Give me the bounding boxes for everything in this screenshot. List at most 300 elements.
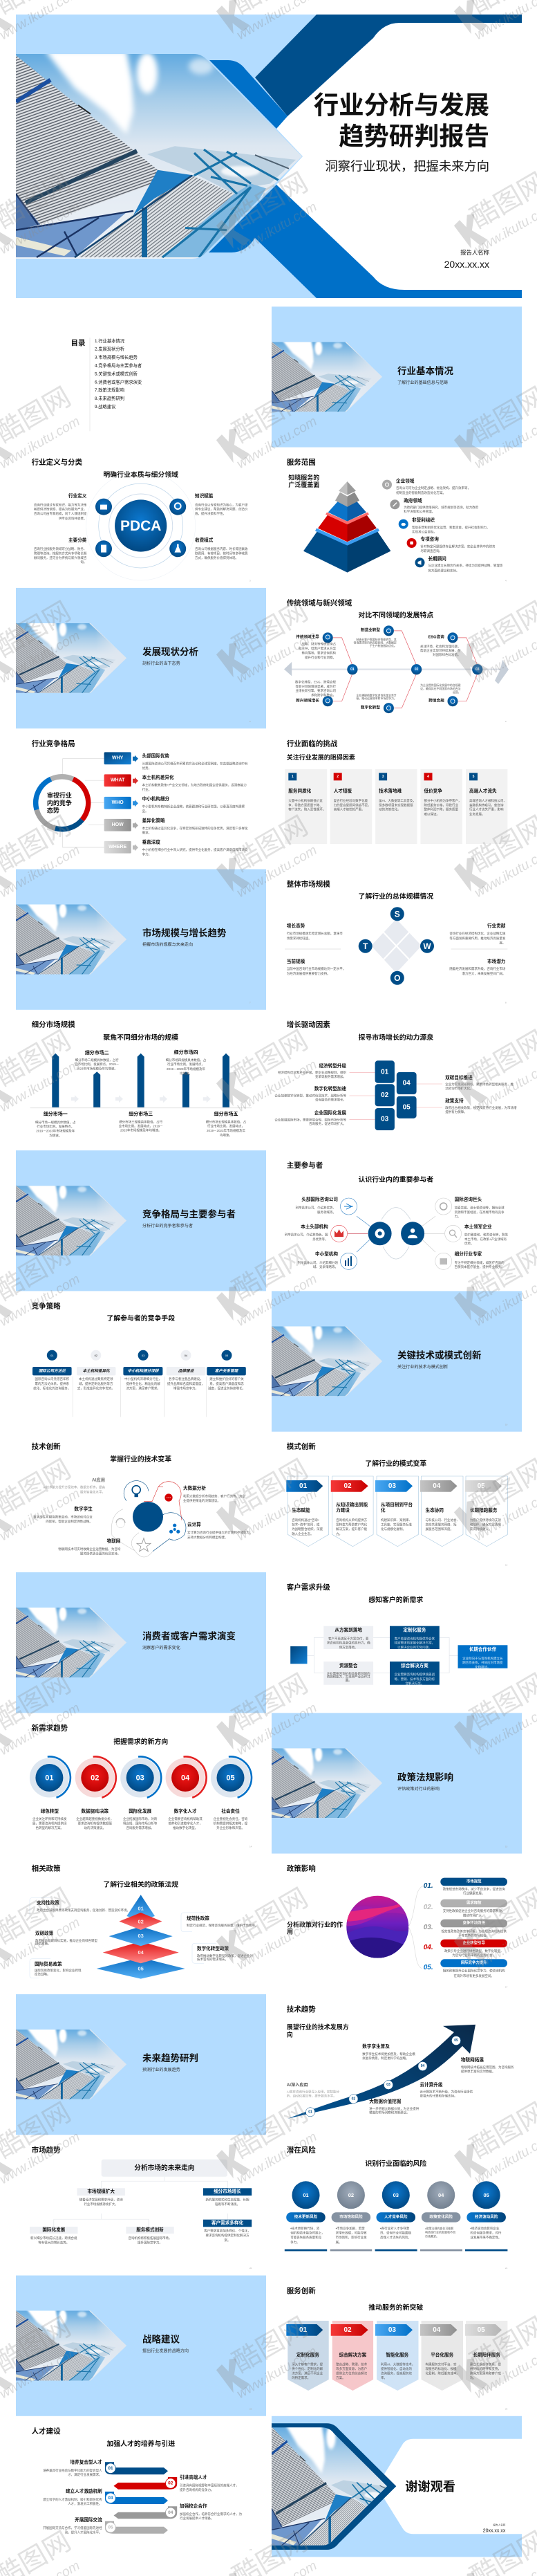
card 03: 咨询服务，提高服务效 — [381, 2371, 412, 2375]
slide title: 细分市场规模 — [32, 1020, 75, 1029]
petal: star — [131, 1533, 153, 1557]
text: AI应用: AI技术助力提升方案效率、数据分析等，提高 — [43, 1484, 106, 1489]
text: 经济转型升级: 变革等服务需求增加。 — [315, 1074, 346, 1079]
card 04 — [420, 2321, 463, 2391]
card 02: 力建设 — [336, 1507, 350, 1513]
text: ESG咨询: ESG咨询 — [428, 634, 444, 640]
risk column 2: 展。 — [336, 2241, 342, 2245]
node: 客户需求多样化: 要求咨询机构提供定制化解决方 — [206, 2233, 249, 2238]
label: 细分市场五: 行业市场比例。发展特点， — [207, 1123, 245, 1128]
label: 细分市场二: 细分市场二规模具体数值，占行 — [75, 1058, 119, 1062]
step 5: 诚度，促进业务持续增长。 — [208, 1386, 245, 1391]
slide: 竞争策略 — [32, 1301, 246, 1417]
step 1: 国际公司方法论 — [39, 1368, 66, 1373]
text: 细分行业专家 — [455, 1251, 505, 1269]
slide title: 增长驱动因素 — [287, 1020, 330, 1029]
text: 知识赋能: 供专业建议，帮助其解决问题、创造价 — [195, 506, 248, 511]
step 5: 客户关系管理 — [215, 1368, 239, 1373]
block 02 — [375, 1084, 395, 1106]
text: 数字化转型加速 — [275, 1085, 346, 1103]
label: 细分市场三: 细分市场三 — [129, 1111, 153, 1117]
text: 主要分类: 主要分类 — [68, 537, 87, 543]
slide: 行业定义与分类: 3 — [249, 580, 251, 582]
section title: 未来趋势研判 — [142, 2052, 198, 2063]
card 3: 虽AI、大数据等工具普及， — [379, 798, 416, 803]
text: 国际咨询巨头: 力。 — [455, 1214, 461, 1219]
card 2: 力的复合型顾问供给不足， — [334, 802, 371, 807]
ring label: 审视行业 — [47, 791, 72, 799]
item 05 — [424, 1959, 507, 1978]
card 03: 提供智能化、自动化的 — [381, 2366, 412, 2371]
card 01: 决方案，满足不同企业 — [292, 2371, 323, 2375]
text: 本土领军企业 — [464, 1223, 508, 1246]
card 04: 04 — [433, 2326, 441, 2334]
card 03: 化与规模化复制。 — [381, 1527, 406, 1531]
node: 客户需求多样化: 案。 — [224, 2238, 231, 2243]
label: 细分市场一: 均增速。 — [49, 1133, 62, 1138]
text: 收费模式: 收费模式 — [195, 537, 214, 543]
text: 当前规模: 当前中国咨询行业市场规模达到一定水平， — [287, 966, 346, 971]
item 01: 行业健康发展。 — [463, 1890, 484, 1895]
card: 双碳政策: 双碳政策 — [35, 1930, 54, 1936]
item: 非营利组织: 实现其公益目标。 — [412, 529, 437, 534]
section photo — [16, 1606, 126, 1679]
box: 综合解决方案: 合解决方案。 — [405, 1681, 424, 1686]
item 02 — [424, 1899, 507, 1917]
disc 01: 01 — [45, 1774, 54, 1782]
watermark layer: www.ikutu.com — [234, 1486, 319, 1544]
text: 社会责任: 企业重视社会责任，咨询 — [214, 1816, 248, 1821]
label: 细分市场二: 2023年市场规模及年均增速。 — [76, 1067, 117, 1071]
slide title: 竞争策略 — [32, 1301, 61, 1310]
text: 数据驱动决策 — [76, 1808, 113, 1830]
watermark layer: www.ikutu.com — [234, 1057, 319, 1115]
slide: 新需求趋势 — [26, 1723, 254, 1848]
slide subheading: 关注行业发展的阻碍因素 — [287, 753, 355, 761]
watermark layer: 酷图网 — [228, 1454, 313, 1520]
card 05: 建立长期合作关系，提 — [470, 2362, 501, 2367]
risk column 1: •技术更新换代快，咨 — [290, 2226, 320, 2231]
text: 本土领军企业: 如尔雅泰和、和君咨询等，熟悉 — [464, 1232, 508, 1237]
slide subtitle: 了解参与者的竞争手段 — [106, 1314, 175, 1323]
step 5: 建立和维护良好的客户关 — [209, 1377, 244, 1381]
text: 市场潜力: 潜力巨大，未来发展空间广阔。 — [462, 971, 505, 976]
card 02: 咨询机构从单纯提供方 — [336, 1518, 368, 1522]
label: 细分市场五: 细分市场五 — [214, 1110, 238, 1116]
card 04: 现服务的标准化、规模 — [426, 2366, 457, 2371]
text: 大数据分析: 大数据分析 — [183, 1484, 206, 1491]
card 4 — [420, 769, 462, 844]
petal: bulb — [124, 1481, 163, 1502]
arrow node 01 — [305, 2108, 315, 2117]
card 05 — [465, 2321, 507, 2391]
button WHO: WHO — [112, 800, 124, 805]
item: 企业领域: 初制造业的智能制造改造优化方案。 — [396, 490, 446, 495]
card: 数字化转型政策 — [192, 1943, 253, 1963]
text: 市场潜力: 市场潜力 — [487, 958, 506, 964]
text: 知识赋能 — [195, 493, 248, 516]
card 05: 05 — [478, 2326, 485, 2334]
box: 从方案到落地 — [323, 1626, 373, 1650]
slide title: 服务范围 — [287, 458, 316, 467]
disc 04 — [162, 1755, 208, 1801]
card 01 — [286, 2321, 329, 2391]
item: 本土机构差异化: 本土机构差异化 — [142, 774, 174, 780]
card: 国际贸易政策: 投资战略。 — [35, 1972, 50, 1977]
text: 数字化转型: 数字化转型 — [361, 704, 380, 710]
text: 市场潜力 — [449, 958, 506, 976]
text: 云计算升级: 云计算技术不断升级，为咨询行业提供 — [420, 2089, 473, 2094]
PDCA core — [115, 499, 167, 552]
section title: 战略建议 — [142, 2334, 180, 2345]
slide: 模式创新 — [286, 1442, 508, 1567]
card 2: 2 — [337, 775, 339, 779]
item 04: 企业转型引导 — [463, 1940, 485, 1946]
text: 双碳目标推进: 动咨询市场扩大化。 — [445, 1086, 473, 1091]
watermark layer: 酷图网 — [228, 811, 313, 877]
text: 本土头部机构: 列举具体公司，介绍其特色、服 — [285, 1232, 328, 1237]
text: 新兴领域增长: 术和跨学科整合。 — [311, 692, 336, 697]
text: 大数据价值挖掘: 精准的市场洞察和决策建议。 — [369, 2110, 410, 2115]
box: 资源整合: 资源整合 — [339, 1662, 358, 1668]
label: 细分市场五 — [206, 1110, 247, 1137]
side heading: 展望行业的技术发展方 — [287, 2023, 349, 2031]
box: 从方案到落地: 保方案落地。 — [339, 1645, 358, 1650]
text: 数据驱动决策: 企业越来越重视数据分析， — [76, 1816, 113, 1821]
text: 行业定义 — [34, 493, 87, 521]
section title: 行业基本情况 — [397, 365, 453, 376]
card 04: 高校共建服务网络，拓 — [426, 1522, 457, 1527]
text: 行业定义: 咨询行业通过专家知识、能力等为决策 — [34, 502, 87, 507]
slide: 服务创新 — [286, 2286, 508, 2410]
text: 传统领域主导: 传统领域主导 — [296, 634, 319, 640]
slide title: 整体市场规模 — [287, 880, 330, 888]
text: 头部国际咨询公司 — [296, 1196, 338, 1215]
hub left — [368, 1222, 392, 1245]
step 3: 决方案，满足客户需求。 — [126, 1386, 160, 1391]
reporter: 报告人名称 — [493, 2523, 506, 2526]
source square — [290, 1646, 307, 1664]
text: 培养复合型人才: 培养复合型人才 — [70, 2459, 102, 2465]
item 05: 国际竞争力提升 — [461, 1960, 487, 1965]
section photo — [272, 1325, 382, 1397]
text: 绿色转型: 色转型的解决方案。 — [36, 1825, 64, 1830]
text: ESG咨询: 帮助企业实现可持续发展，在 — [420, 648, 461, 653]
card 01: 咨询机构通过“咨询+ — [292, 1518, 320, 1522]
item: 非营利组织: 帮助非营利组织优化运营、筹集资金，提升社会影响力， — [412, 525, 489, 530]
stacked diamonds chart — [97, 1895, 185, 1979]
text: 政策支持: 提供有力保障。 — [445, 1110, 467, 1114]
button HOW: HOW — [112, 822, 124, 827]
block 02: 02 — [381, 1092, 389, 1099]
watermark layer: www.ikutu.com — [234, 2129, 319, 2187]
cover subtitle: 洞察行业现状，把握未来方向 — [325, 159, 489, 173]
arrow 04 — [113, 2506, 177, 2519]
card 1 — [285, 769, 327, 844]
label: 细分市场三: 业市场比例。发展特点，2019－ — [119, 1123, 163, 1128]
step 2: 式，形成差异化竞争优势。 — [77, 1386, 115, 1391]
icon: flask — [169, 540, 186, 557]
text: 新兴领域增长: 新兴领域增长 — [296, 697, 319, 703]
card 02: 02 — [343, 2326, 352, 2334]
text: 行业贡献: 咨询行业在经济结构优化、企业战略实施 — [449, 931, 506, 936]
root box: 分析市场的未来走向 — [134, 2163, 194, 2172]
icon: magnifier — [445, 1225, 462, 1242]
text: 企业国际化发展: 企业拓展国际市场，需要跨境合规、国际市场分析等 — [275, 1118, 346, 1123]
text: 物联网拓展: 提供更丰富的实时数据。 — [461, 2069, 495, 2074]
card 03: 03 — [388, 2326, 396, 2334]
disc 01 — [26, 1755, 72, 1801]
card 04 — [420, 1476, 463, 1547]
petal: chat — [158, 1482, 182, 1520]
card 01: 深入了解客户需求，提 — [292, 2362, 323, 2367]
button WHO — [104, 797, 138, 809]
slide: 服务范围: 4 — [505, 580, 507, 582]
box: 资源整合: 企业需要咨询机构具备跨领域的 — [327, 1671, 370, 1676]
ring label: 态势 — [47, 807, 59, 814]
risk column 5: •经济波动会影响企业 — [470, 2226, 500, 2231]
side heading: 向 — [287, 2031, 293, 2039]
text: 社会责任: 机构需提供相关策略，提 — [214, 1821, 248, 1826]
section photo — [16, 903, 126, 975]
text: 物联网: 服务提供更全面的信息支持。 — [80, 1551, 120, 1556]
block 05 — [397, 1096, 417, 1119]
slide title: 人才建设 — [32, 2427, 61, 2436]
text: 双碳目标推进: 企业为实现双碳目标，聚集绿色转型相关服务，推 — [445, 1082, 514, 1087]
step 2: 本土机构差异化 — [83, 1368, 111, 1373]
side heading: 广泛覆盖面 — [288, 481, 319, 488]
item 03: 规范性政策改善竞争环境，为合规咨询机构提供 — [441, 1929, 507, 1933]
text: 开展国际交流: 验，提升人才国际化水平。 — [65, 2530, 102, 2535]
card 01: 01 — [299, 1482, 308, 1490]
risk column 2: 市场饱和，影响行业发 — [336, 2235, 367, 2240]
text: 本土头部机构: 本土头部机构 — [301, 1223, 328, 1229]
label: 细分市场四 — [166, 1049, 207, 1076]
card 02 — [331, 1476, 373, 1547]
contents list: 9.战略建议 — [95, 403, 116, 410]
blue band bottom — [209, 185, 522, 298]
item: 长期顾问: 各方面的建议和支持。 — [428, 568, 459, 573]
slide title: 主要参与者 — [287, 1161, 323, 1170]
slide subtitle: 了解行业的总体规模情况 — [358, 892, 433, 901]
text: 跨境合规: 运营。 — [453, 690, 460, 694]
card 02: 提供全方位的综合解决 — [336, 2371, 368, 2375]
text: 数字化转型 — [356, 693, 397, 710]
text: 国际咨询巨头: 如麦肯锡、波士顿咨询等，拥有全球 — [455, 1205, 505, 1210]
slide: section 政策法规影响 — [272, 1713, 522, 1854]
node 02 — [411, 664, 422, 674]
card 03: 化 — [381, 1507, 386, 1513]
card 4: 4 — [427, 775, 429, 779]
item: 中小机构细分: 中小型机构专精特新企业战略，依靠跟进和行业研究强，以垂直深度构建壁 — [142, 804, 245, 809]
slide: section 战略建议: 22 — [249, 2407, 252, 2410]
item 04: 为咨询行业带来新的业务机会。 — [452, 1953, 496, 1958]
cover title — [314, 91, 489, 151]
text: 社会责任: 社会责任 — [221, 1808, 240, 1814]
item 03 — [424, 1920, 507, 1938]
text: 行业定义: 行业定义 — [68, 493, 87, 499]
step 1: 01 — [50, 1354, 54, 1357]
label: 细分市场四: 2019－2023年市场规模及年 — [167, 1067, 206, 1071]
slide: 政策影响: 17 — [505, 1986, 508, 1989]
item: 非营利组织 — [399, 517, 489, 534]
text: 跨境合规 — [420, 683, 461, 703]
slide subtitle: 对比不同领域的发展特点 — [358, 610, 433, 619]
text: 大数据分析: 业提供更精准的决策建议。 — [183, 1498, 220, 1503]
step 5: 05 — [225, 1354, 229, 1357]
card 05 — [465, 1476, 507, 1547]
box: 资源整合: 赢。 — [346, 1678, 352, 1682]
text: 数字孪生 — [33, 1505, 93, 1524]
cover photo — [16, 50, 306, 259]
slide: cover — [16, 15, 522, 298]
section subtitle: 提出行业发展的战略方向 — [142, 2348, 189, 2353]
text: 绿色转型: 绿色转型 — [41, 1808, 59, 1814]
item: 长期顾问 — [415, 555, 503, 573]
text: 收费模式: 取费用，有按项目、按时间等多种收费 — [195, 551, 248, 555]
text: 政策支持: 政策支持 — [445, 1098, 464, 1104]
box: 长期合作伙伴: 企业倾向于与咨询机构建立长 — [462, 1656, 503, 1661]
card 3: 动的决策优化。 — [379, 807, 401, 812]
text: 经济转型升级 — [278, 1062, 346, 1079]
stacked diamonds chart: 01 — [138, 1906, 144, 1912]
text: 头部国际咨询公司: 列举具体公司，介绍其优势、 — [296, 1205, 336, 1210]
text: 国际化发展: 国际化发展 — [129, 1808, 152, 1814]
risk column 4 — [420, 2181, 462, 2251]
item: 本土机构差异化: 行业。 — [142, 787, 151, 792]
item 01 — [424, 1878, 507, 1895]
label: 细分市场三: 细分市场三规模具体数值，占行 — [119, 1119, 163, 1124]
card 05: 功。 — [470, 2375, 476, 2380]
card 01: 定制化服务 — [296, 2352, 319, 2357]
text: 加强校企合作: 行业发展提供人才储备。 — [180, 2516, 214, 2521]
text: 数字孪生普及: 数字孪生技术将更加普及，帮助企业模 — [362, 2052, 415, 2057]
PDCA ring diagram — [86, 471, 196, 580]
text: 收费模式: 方式，确保服务价值得到体现。 — [195, 555, 238, 560]
slide: 技术创新 — [32, 1442, 252, 1557]
card: 双碳政策: 政府推动双碳目标实施，推动企业向绿色转型 — [35, 1938, 97, 1943]
card 01: 的特定需求。 — [292, 2375, 310, 2380]
text: 行业定义: 供专业咨询并收费。 — [59, 516, 86, 521]
text: 传统领域主导: 战略、财务等传统咨询占 — [301, 641, 336, 646]
text: 培养复合型人才 — [43, 2458, 102, 2477]
card 02 — [331, 2321, 373, 2391]
node 02: 02 — [415, 668, 419, 672]
card 2 — [330, 769, 372, 844]
item: 企业领域: 咨询公司可为企业制定战略、优化架构、提升效率等， — [396, 486, 471, 490]
text: 细分行业专家: 专注于特定细分领域，如医疗咨询的 — [455, 1260, 505, 1265]
text: 增长态势 — [287, 923, 343, 941]
text: 云计算: 支持大数据分析和模型构建。 — [187, 1535, 228, 1540]
slide: 潜在风险: 21 — [505, 2267, 508, 2270]
text: 云计算升级: 更强大的计算和存储支持。 — [420, 2093, 458, 2098]
item: 垂直深度: 争力。 — [142, 852, 151, 856]
card 02: 解决方案，提升客户能 — [336, 1527, 368, 1531]
card 05: 05 — [478, 1482, 485, 1490]
arrow node 04 — [418, 2061, 427, 2071]
card 1: 客户流失，陷入恶性循环。 — [288, 807, 326, 812]
item 05: 相关政策提升企业国际化竞争力，使咨询机构 — [443, 1968, 505, 1973]
slide title: 服务创新 — [287, 2286, 316, 2295]
item 04 — [424, 1940, 507, 1958]
text: 传统领域主导: 转向落地，要求咨询机构 — [301, 650, 336, 655]
side heading — [287, 2023, 349, 2039]
watermark layer: www.ikutu.com — [234, 1271, 319, 1330]
text: 主要分类 — [34, 537, 87, 564]
card 05: 长期陪伴服务 — [473, 2352, 500, 2357]
item: 政府领域 — [390, 497, 479, 514]
text: 云计算升级: 云计算升级 — [420, 2081, 443, 2088]
card 5: 高端咨询人才被科技公司、 — [469, 798, 507, 803]
icon: crown — [331, 1225, 348, 1242]
box: 长期合作伙伴 — [458, 1645, 507, 1670]
item: 非营利组织: 非营利组织 — [412, 517, 435, 523]
side heading — [287, 1921, 343, 1935]
watermark layer: www.ikutu.com — [234, 843, 319, 901]
section subtitle: 关注行业的技术与模式创新 — [397, 1364, 448, 1370]
slide: section 市场规模与增长趋势: 7 — [249, 1002, 251, 1004]
step 3: 提供专业化、精准化的解 — [126, 1381, 160, 1386]
step 2 — [77, 1350, 116, 1390]
text: 社会责任 — [214, 1808, 248, 1830]
label: 细分市场五: 2019－2023年市场规模及年 — [207, 1128, 246, 1133]
item: 垂直深度 — [142, 838, 248, 856]
card 03: 利用AI、大数据等技术， — [381, 2362, 415, 2367]
step 4: 品牌建设 — [178, 1368, 195, 1373]
text: 大数据价值挖掘: 进一步挖掘大数据价值，为企业提供 — [369, 2106, 420, 2111]
risk column 5: 经济波动风险 — [475, 2214, 498, 2219]
disc 05 — [207, 1755, 254, 1801]
text: 细分行业专家: 细分行业专家 — [455, 1251, 482, 1257]
item: 政府领域: 科学决策和公共管理。 — [404, 509, 435, 514]
white panel — [276, 23, 522, 290]
card: 国际贸易政策: 国际贸易政策 — [35, 1961, 62, 1967]
text: ESG咨询: 对国际绿色标准前。 — [433, 652, 460, 657]
card 04: 04 — [433, 1482, 441, 1490]
label: 细分市场二: 细分市场二 — [85, 1049, 109, 1056]
text: 企业国际化发展: 企业国际化发展 — [314, 1110, 346, 1116]
card 1: 服务同质化 — [288, 787, 312, 793]
text: 跨境合规: 为企业提供国际化发展中的合规建 — [420, 683, 461, 687]
risk column 3: 高端人才流失的风险。 — [380, 2235, 411, 2240]
text: AI深入应用 — [287, 2082, 340, 2099]
box: 资源整合: 资源和能力，实现跨产业合作共 — [327, 1674, 370, 1680]
block 01 — [375, 1060, 395, 1083]
step 5: 系，提高客户满意度和忠 — [209, 1381, 244, 1386]
text: 物联网拓展: 物联网拓展 — [461, 2057, 484, 2063]
slide: section 政策法规影响: 15 — [505, 1845, 508, 1848]
closing photo — [272, 2427, 387, 2546]
slide: 客户需求升级 — [287, 1583, 507, 1686]
slide subtitle: 掌握行业的技术变革 — [110, 1454, 171, 1463]
text: 头部国际咨询公司: 头部国际咨询公司 — [301, 1196, 338, 1202]
slide title: 客户需求升级 — [287, 1583, 330, 1592]
text: ESG咨询 — [420, 634, 461, 657]
text: 数字孪生普及 — [362, 2043, 415, 2061]
card 02: 从知识输出到能 — [336, 1501, 368, 1507]
step 1: 统化、标准化的咨询服务。 — [33, 1386, 70, 1391]
risk column 1: 技术更新风险 — [294, 2214, 318, 2219]
section title: 政策法规影响 — [397, 1772, 453, 1783]
slide title: 模式创新 — [287, 1442, 316, 1451]
disc 04: 04 — [181, 1774, 190, 1782]
text: 物联网: 物联网技术可实时收集企业运营数据，为咨询 — [58, 1547, 121, 1552]
slide: closing — [272, 2416, 522, 2557]
date: 20xx.xx.xx — [444, 259, 489, 270]
letter S: S — [395, 909, 400, 919]
icon: gear — [435, 1198, 452, 1215]
slide title: 新需求趋势 — [32, 1723, 68, 1732]
